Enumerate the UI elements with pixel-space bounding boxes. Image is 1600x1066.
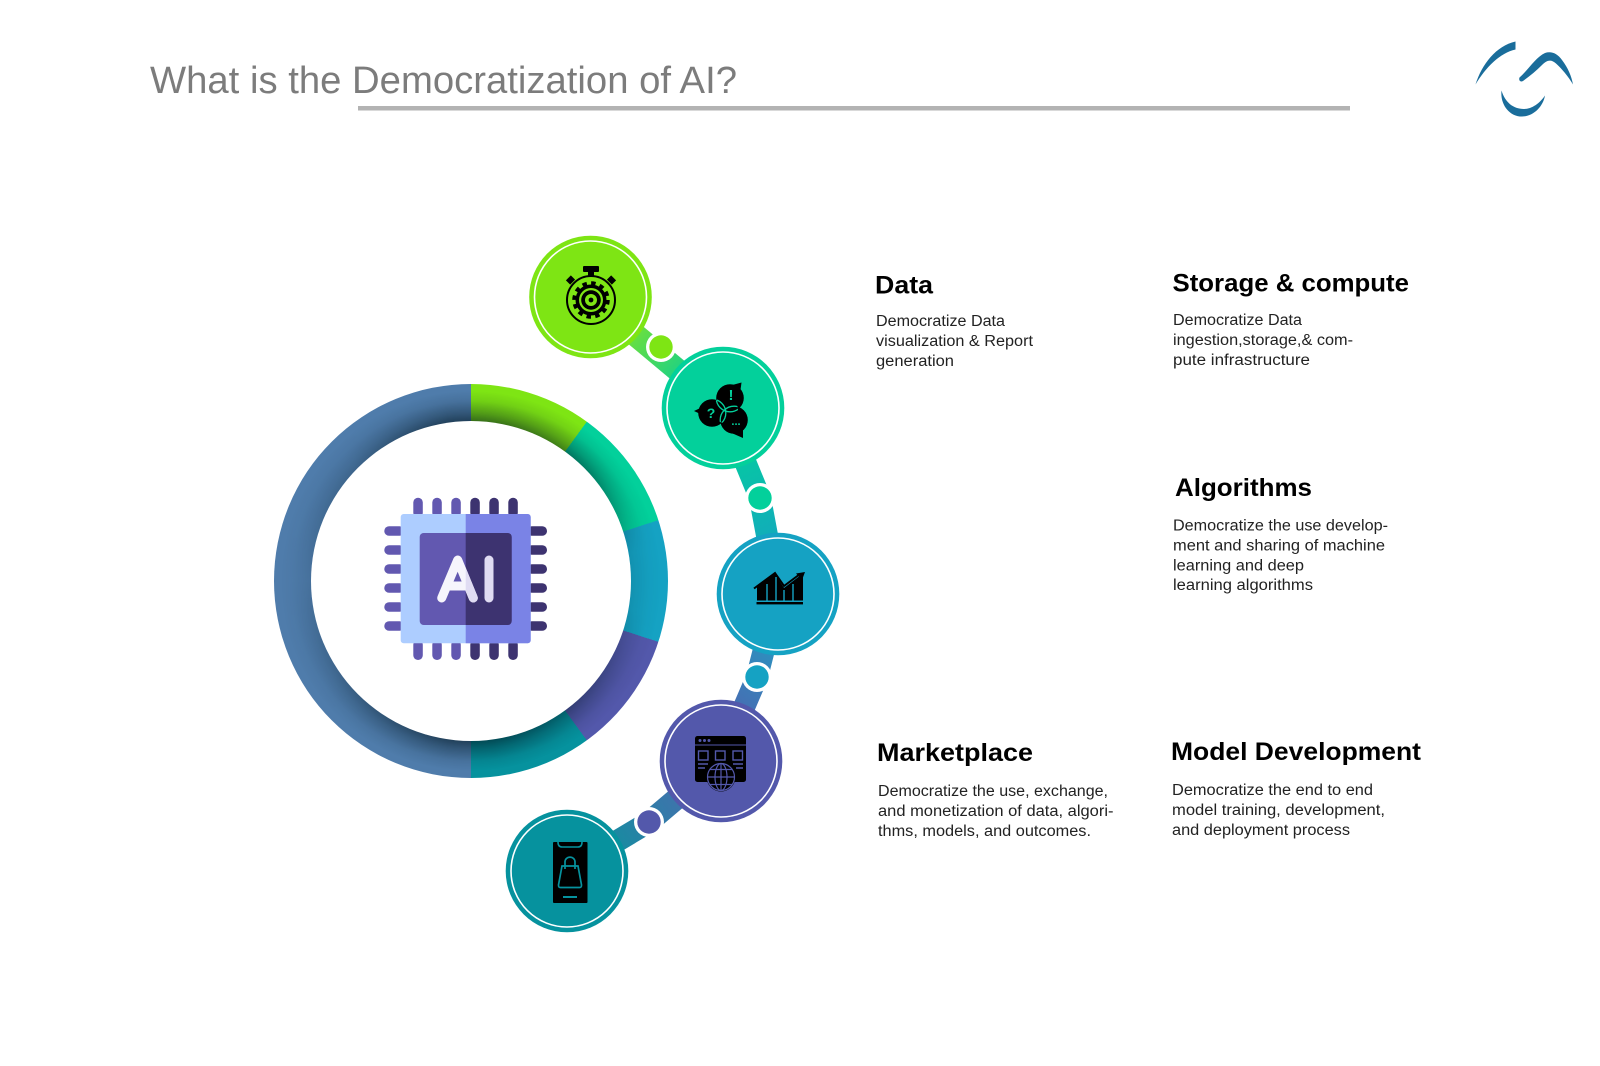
- title: What is the Democratization of AI?: [150, 60, 737, 102]
- text block: Storage & compute: [1172, 270, 1409, 369]
- icon: growth chart: [754, 572, 805, 604]
- icon: AI chip: [384, 498, 547, 660]
- text block: Algorithms: [1173, 474, 1388, 594]
- text block: Algorithms: Democratize the use develop-: [1173, 518, 1388, 534]
- connector: web to marketplace: [567, 761, 721, 871]
- connector dot 1: [646, 332, 676, 362]
- text block: Algorithms: Algorithms: [1175, 474, 1312, 502]
- connector: analytics to web: [721, 594, 778, 761]
- icon: three speech bubbles: !: [728, 387, 734, 404]
- node circle: web: [660, 700, 782, 822]
- text block: Marketplace: Democratize the use, exchange,: [878, 783, 1108, 800]
- donut ring with coloured segments: [274, 384, 668, 778]
- connector dot 4: [634, 807, 664, 837]
- text block: Storage & compute: pute infrastructure: [1173, 352, 1310, 369]
- text block: Marketplace: thms, models, and outcomes.: [878, 823, 1091, 840]
- text block: Data: Democratize Data: [876, 313, 1005, 330]
- text block: Data: Data: [875, 272, 934, 300]
- title underline: [358, 106, 1350, 110]
- text block: Model Development: Democratize the end to end: [1172, 782, 1373, 799]
- text block: Marketplace: Marketplace: [877, 739, 1033, 767]
- text block: Algorithms: learning and deep: [1173, 558, 1304, 574]
- text block: Data: visualization & Report: [876, 333, 1034, 350]
- text block: Model Development: [1171, 738, 1422, 839]
- chip letters AI (drawn shape): [442, 560, 489, 598]
- chip body: [401, 514, 531, 643]
- node circle: speech bubbles: [662, 347, 784, 469]
- logo: [1476, 42, 1573, 116]
- text block: Storage & compute: ingestion,storage,& com-: [1173, 332, 1353, 349]
- connector dot 3: [742, 662, 772, 692]
- node circle: shopping phone: [506, 810, 628, 932]
- text block: Model Development: and deployment process: [1172, 822, 1350, 839]
- text block: Marketplace: and monetization of data, algori-: [878, 803, 1114, 820]
- connector: insights to analytics: [723, 408, 778, 594]
- chip pins: [384, 498, 547, 660]
- text block: Algorithms: learning algorithms: [1173, 577, 1313, 594]
- icon: browser with globe: [695, 736, 746, 792]
- text block: Data: [875, 272, 1034, 370]
- text block: Data: generation: [876, 353, 954, 370]
- connector: data to insights: [590, 297, 723, 408]
- connector dot 2: [745, 483, 775, 513]
- icon: stopwatch gear: [566, 266, 616, 324]
- icon: three speech bubbles: [694, 382, 748, 438]
- node circle: stopwatch: [529, 236, 652, 358]
- text block: Marketplace: [877, 739, 1114, 840]
- text block: Storage & compute: Storage & compute: [1172, 270, 1409, 298]
- text block: Storage & compute: Democratize Data: [1173, 312, 1302, 329]
- text block: Model Development: Model Development: [1171, 738, 1422, 766]
- node circle: chart: [717, 533, 839, 655]
- text block: Algorithms: ment and sharing of machine: [1173, 538, 1385, 554]
- icon: three speech bubbles: ?: [707, 405, 715, 421]
- icon: three speech bubbles: ...: [731, 416, 741, 428]
- icon: phone with shopping bag: [553, 842, 588, 903]
- text block: Model Development: model training, development,: [1172, 802, 1385, 819]
